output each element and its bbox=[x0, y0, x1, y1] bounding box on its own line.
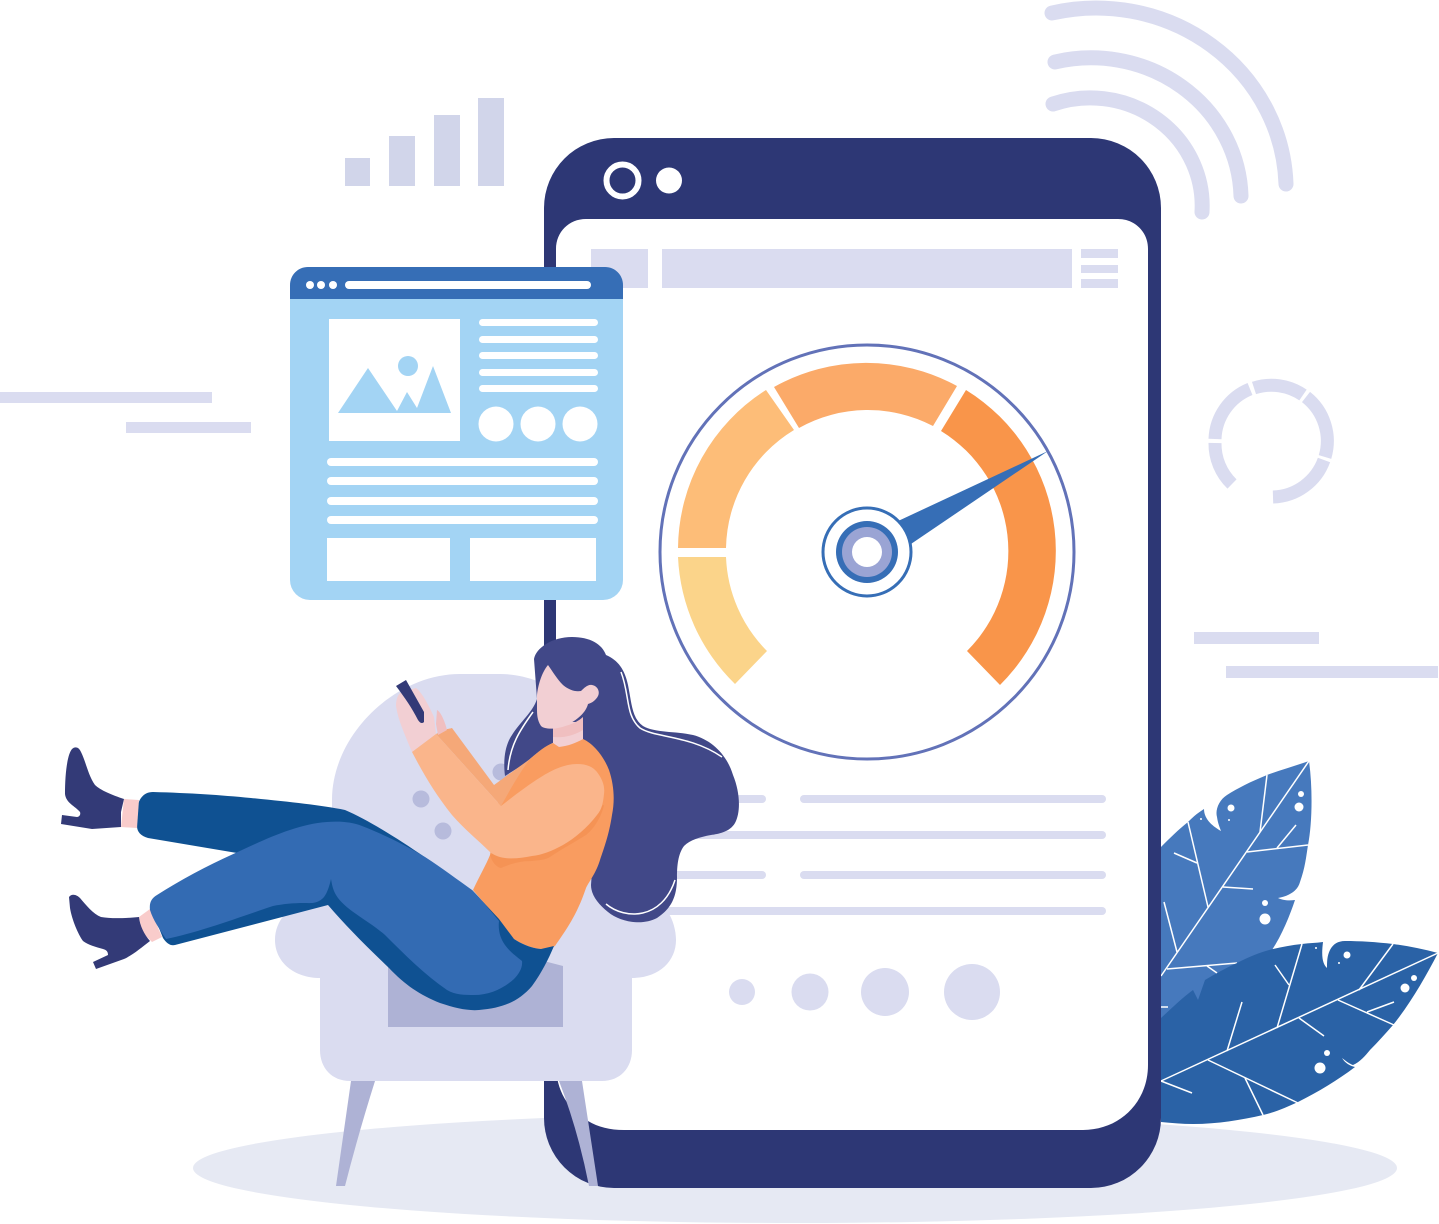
woman bbox=[61, 637, 739, 1010]
pagination dots bbox=[729, 964, 1000, 1020]
gauge segment: dark orange bbox=[941, 390, 1056, 685]
armchair bbox=[275, 674, 676, 1186]
browser window card bbox=[290, 267, 623, 600]
chair buttons bbox=[412, 764, 510, 840]
lower boot bbox=[69, 895, 162, 969]
back leaf bbox=[1161, 761, 1312, 1030]
card buttons bbox=[327, 538, 596, 581]
image placeholder bbox=[329, 319, 460, 441]
icon: signal bars bbox=[345, 98, 504, 186]
sleeve bbox=[412, 734, 604, 858]
front leg dark underside bbox=[150, 860, 554, 1010]
hair bbox=[504, 637, 739, 922]
icon: donut ring bbox=[1215, 385, 1327, 497]
gauge outer ring bbox=[660, 345, 1074, 759]
card header bbox=[290, 267, 623, 299]
gauge hub bbox=[823, 508, 911, 596]
front leg bbox=[150, 822, 522, 995]
back leg bbox=[137, 792, 474, 892]
card text lines and circles bbox=[327, 319, 598, 524]
ground shadow bbox=[193, 1113, 1397, 1223]
phone screen bbox=[556, 219, 1148, 1130]
right fingers bbox=[436, 710, 447, 735]
chair seat cushion bbox=[388, 960, 563, 1027]
sweater shadow bbox=[490, 805, 604, 868]
speedometer gauge bbox=[660, 345, 1074, 759]
phone body bbox=[544, 138, 1161, 1188]
camera lens bbox=[606, 164, 638, 196]
chair legs bbox=[336, 1081, 598, 1186]
face bbox=[537, 665, 599, 729]
screen header bars bbox=[591, 249, 1118, 288]
neck bbox=[553, 722, 583, 752]
upper boot bbox=[61, 747, 139, 829]
decorative motion lines bbox=[0, 392, 1438, 678]
upper arm shading bbox=[436, 728, 530, 806]
chair body bbox=[275, 674, 676, 1081]
smartphone in hand bbox=[396, 680, 424, 723]
front leaf bbox=[1161, 941, 1438, 1124]
gauge needle bbox=[896, 451, 1048, 546]
gauge segment: yellow bbox=[678, 557, 767, 684]
card body bbox=[290, 267, 623, 600]
window dots and address bar bbox=[306, 281, 591, 289]
sweater bbox=[473, 739, 614, 949]
screen text lines bbox=[650, 795, 1106, 915]
gauge segment: light orange bbox=[678, 390, 794, 548]
phone bbox=[544, 138, 1161, 1188]
camera dot bbox=[656, 168, 682, 194]
gauge segment: mid orange bbox=[774, 363, 957, 428]
left hand bbox=[396, 688, 436, 752]
icon: wifi arcs bbox=[1052, 8, 1286, 212]
